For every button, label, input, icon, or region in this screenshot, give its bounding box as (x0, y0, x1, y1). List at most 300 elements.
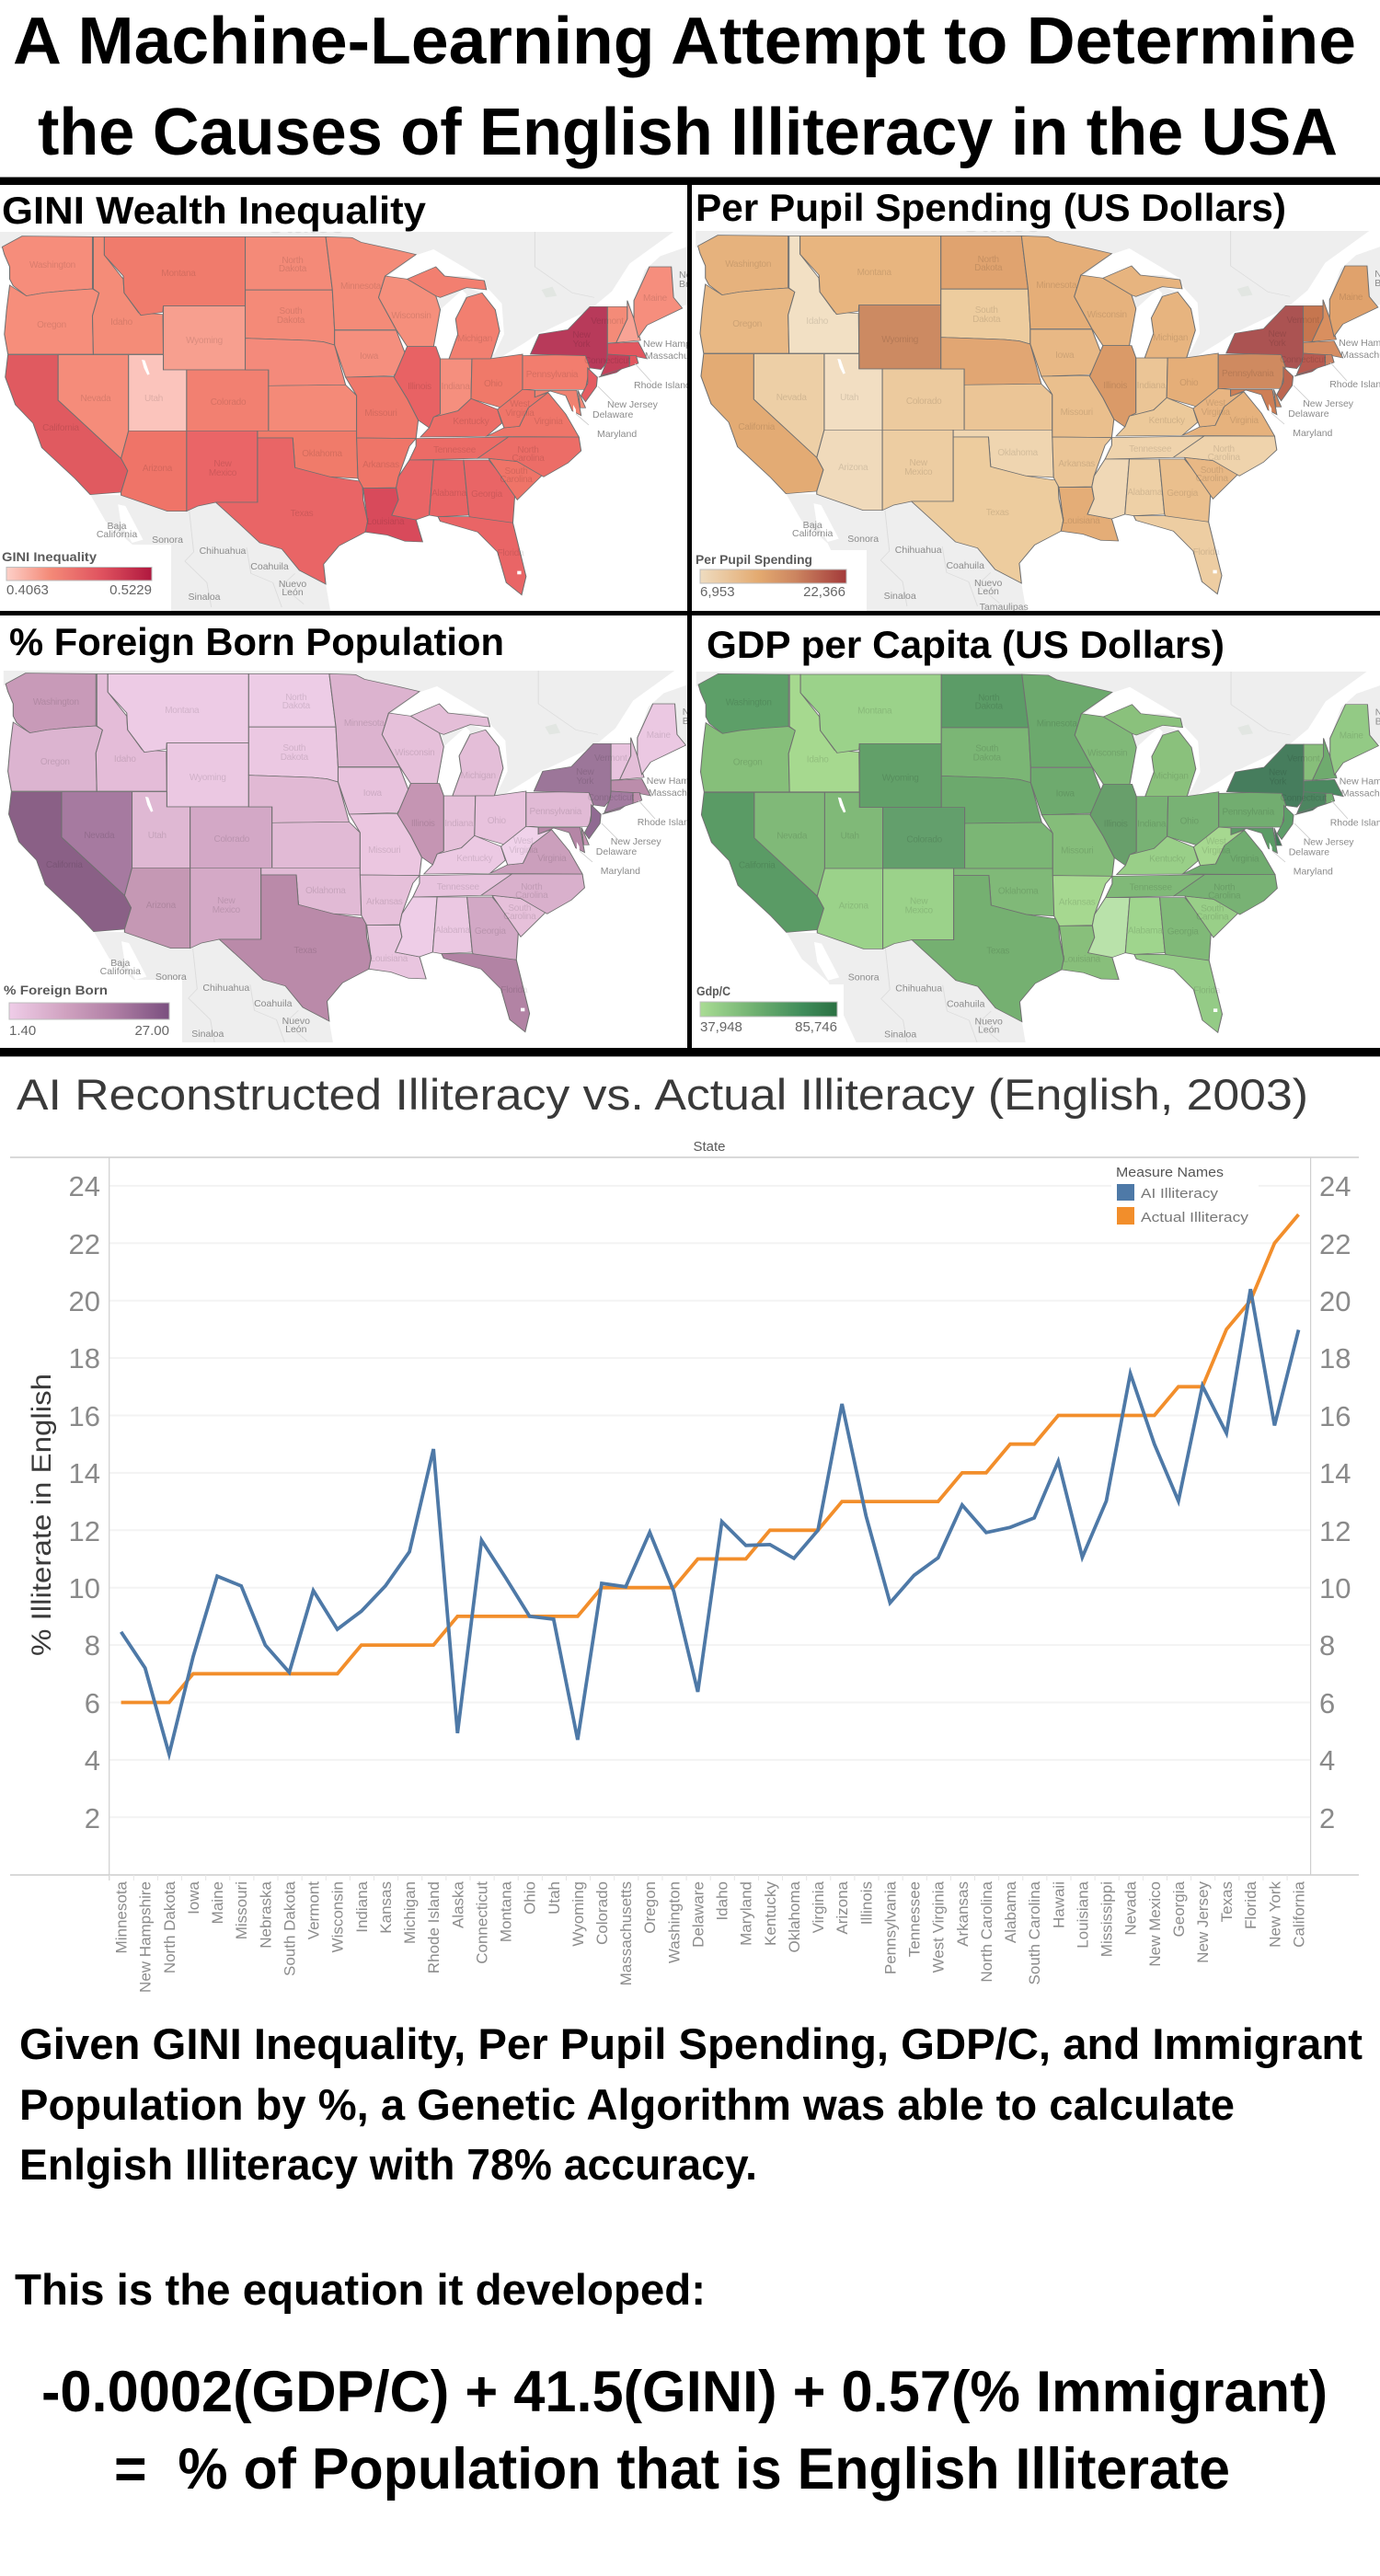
x axis state labels: Nebraska (257, 1880, 274, 1949)
foreign born choropleth map: Virginia (509, 845, 538, 856)
GDP per capita choropleth map: North (978, 694, 999, 704)
GINI choropleth map: Montana (161, 269, 196, 279)
per pupil spending choropleth map: West (1205, 398, 1225, 408)
GDP per capita choropleth map: Texas (986, 947, 1009, 957)
per pupil spending choropleth map: Chihuahua (895, 545, 942, 556)
per pupil spending choropleth map: Oregon (732, 319, 762, 329)
per pupil spending choropleth map: Carolina (1208, 453, 1241, 463)
per pupil spending choropleth map: Dakota (974, 263, 1003, 273)
x axis state labels: Virginia (810, 1880, 827, 1933)
GDP per capita choropleth map: Nuevo (975, 1017, 1003, 1028)
per pupil spending choropleth map: Indiana (1137, 381, 1166, 391)
GDP per capita choropleth map: Dakota (975, 702, 1003, 712)
GDP per capita choropleth map: Washington (726, 698, 772, 708)
x axis state labels: Washington (665, 1881, 683, 1963)
per pupil spending choropleth map: Louisiana (1063, 516, 1100, 526)
x axis state labels: Maryland (738, 1881, 755, 1946)
foreign born choropleth map: States (270, 646, 349, 676)
x axis state labels: Kentucky (762, 1881, 779, 1946)
foreign born legend: 27.00 (134, 1023, 169, 1039)
foreign born choropleth map: Connecticut (588, 793, 634, 803)
left y axis labels: 12 (69, 1515, 100, 1547)
left y axis labels: 10 (69, 1572, 100, 1604)
GDP per capita choropleth map: Idaho (807, 755, 829, 765)
foreign born choropleth map: New (217, 896, 236, 906)
GDP per capita choropleth map: Michigan (1154, 772, 1189, 782)
line chart: AI vs actual illiteracy by state (10, 1139, 1359, 1993)
per pupil spending choropleth map: Washington (725, 259, 771, 270)
GINI choropleth map: Arizona (143, 464, 173, 474)
GDP per capita legend (692, 984, 844, 1042)
GDP per capita choropleth map: New (1269, 768, 1287, 778)
per pupil spending choropleth map: Vermont (1286, 316, 1319, 326)
per pupil spending choropleth map: Tennessee (1129, 444, 1172, 454)
per pupil spending choropleth map: New (1269, 329, 1287, 339)
x axis state labels: Oklahoma (786, 1880, 803, 1952)
right y axis labels: 6 (1319, 1687, 1335, 1719)
GINI choropleth map: North (517, 445, 539, 455)
per pupil spending legend: 6,953 (700, 584, 735, 600)
foreign born choropleth map: Oklahoma (305, 886, 346, 896)
GINI choropleth map: Carolina (512, 454, 545, 464)
legend: measure names (1111, 1161, 1259, 1227)
per pupil spending choropleth map: California (792, 528, 834, 539)
foreign born choropleth map: Sonora (155, 972, 187, 983)
GINI legend: 0.4063 (6, 582, 49, 598)
foreign born choropleth map: New (683, 707, 702, 718)
right y axis labels: 10 (1319, 1572, 1351, 1604)
GINI choropleth map: New Jersey (607, 399, 659, 410)
per pupil spending choropleth map: Connecticut (1280, 355, 1327, 365)
foreign born choropleth map: Arizona (146, 901, 177, 911)
per pupil spending legend: Per Pupil Spending (696, 553, 812, 567)
equation (41, 2360, 1328, 2501)
x axis state labels: Wyoming (569, 1881, 587, 1947)
x axis state labels: New Jersey (1194, 1881, 1212, 1963)
per pupil spending choropleth map: South (1201, 466, 1224, 476)
left y axis labels: 16 (69, 1400, 100, 1432)
GINI choropleth map: New (572, 330, 592, 340)
legend: measure names: AI Illiteracy (1141, 1186, 1219, 1202)
per pupil spending choropleth map: Pennsylvania (1222, 369, 1274, 379)
GDP per capita choropleth map: West (1206, 837, 1226, 847)
per pupil spending choropleth map: Virginia (1230, 416, 1259, 426)
per pupil spending choropleth map: Minnesota (1036, 281, 1077, 291)
foreign born choropleth map: Arkansas (366, 897, 403, 907)
right y axis labels: 20 (1319, 1285, 1351, 1317)
GINI choropleth map: Utah (144, 394, 163, 404)
GDP per capita choropleth map: Oklahoma (998, 887, 1039, 897)
per pupil spending choropleth map (696, 231, 1380, 611)
left y axis labels: 8 (85, 1629, 100, 1662)
panel: per pupil spending (692, 182, 1380, 634)
GDP per capita choropleth map: States (962, 647, 1041, 677)
foreign born choropleth map: Chihuahua (202, 983, 249, 994)
per pupil spending choropleth map: Maine (1339, 293, 1363, 303)
GDP per capita choropleth map: Virginia (1230, 855, 1259, 865)
GDP per capita choropleth map: Iowa (1056, 789, 1075, 799)
GINI choropleth map: Colorado (211, 397, 247, 408)
foreign born choropleth map: Carolina (515, 891, 548, 901)
x axis state labels: Hawaii (1050, 1881, 1067, 1928)
per pupil spending choropleth map: León (978, 586, 999, 597)
per pupil spending choropleth map: Sinaloa (884, 591, 916, 602)
GINI choropleth map: Idaho (110, 317, 133, 328)
GDP per capita choropleth map: Louisiana (1063, 955, 1101, 965)
GINI choropleth map: Sonora (152, 535, 183, 546)
GINI choropleth map: Virginia (505, 408, 535, 419)
x axis state labels: Minnesota (113, 1880, 131, 1953)
GDP per capita legend: 85,746 (795, 1019, 837, 1035)
GINI legend (0, 545, 171, 611)
GINI choropleth map: Michigan (457, 334, 492, 344)
foreign born choropleth map: California (100, 966, 141, 977)
GDP per capita choropleth map: Nevada (776, 832, 808, 842)
x axis state labels: Wisconsin (329, 1881, 347, 1952)
GINI choropleth map: New (679, 270, 698, 281)
series: AI illiteracy (121, 1289, 1298, 1754)
x axis state labels: Montana (497, 1880, 515, 1942)
GDP per capita choropleth map: Sinaloa (884, 1029, 916, 1041)
GDP per capita choropleth map: Arizona (839, 902, 868, 912)
GINI choropleth map: Georgia (471, 489, 503, 500)
GINI choropleth map: Maryland (597, 429, 637, 440)
GDP per capita choropleth map: Oregon (733, 758, 763, 768)
per pupil spending choropleth map: California (738, 422, 776, 432)
GINI choropleth map: California (42, 423, 80, 433)
GINI choropleth map: Oregon (37, 320, 66, 330)
left y axis labels: 4 (85, 1744, 100, 1777)
GDP per capita choropleth map: Kentucky (1149, 855, 1186, 865)
x axis state labels: Arkansas (954, 1881, 972, 1947)
GDP per capita choropleth map: North (1213, 883, 1235, 893)
x axis state labels: New Mexico (1146, 1881, 1164, 1967)
GINI choropleth map: Oklahoma (302, 449, 342, 459)
GDP per capita choropleth map: Indiana (1137, 820, 1167, 830)
per pupil spending choropleth map: Mexico (904, 467, 933, 477)
GINI choropleth map: Baja (107, 521, 127, 532)
y axis title: % Illiterate in English (27, 1374, 57, 1656)
per pupil spending choropleth map: Illinois (1103, 381, 1127, 391)
GDP per capita choropleth map: Coahuila (947, 999, 985, 1010)
GINI choropleth map: Indiana (441, 382, 470, 392)
GDP per capita choropleth map: Arkansas (1059, 898, 1096, 908)
foreign born choropleth map: Nuevo (282, 1016, 310, 1027)
GINI choropleth map: Vermont (591, 316, 624, 327)
per pupil spending choropleth map: Florida (1193, 547, 1220, 558)
x axis state labels: Massachusetts (617, 1881, 635, 1985)
GDP per capita choropleth map: New Jersey (1304, 837, 1354, 848)
GDP per capita choropleth map: Maryland (1294, 867, 1333, 878)
per pupil spending choropleth map: Arkansas (1058, 459, 1095, 469)
left y axis labels: 20 (69, 1285, 100, 1317)
x axis state labels: California (1290, 1880, 1308, 1948)
per pupil spending choropleth map: Baja (803, 520, 822, 531)
x axis state labels: Tennessee (906, 1881, 924, 1957)
foreign born choropleth map: Carolina (503, 912, 536, 922)
foreign born choropleth map: Dakota (282, 701, 311, 711)
foreign born choropleth map: Oregon (40, 757, 70, 767)
GDP per capita choropleth map: York (1269, 777, 1287, 788)
right y axis labels (1319, 1170, 1351, 1834)
x axis state labels: South Dakota (281, 1880, 298, 1976)
GINI choropleth map: Chihuahua (200, 546, 247, 557)
GINI choropleth map: Maine (643, 293, 668, 304)
foreign born choropleth map: Maine (647, 730, 671, 741)
GINI choropleth map: New (213, 459, 233, 469)
per pupil spending choropleth map: North (1213, 444, 1235, 454)
GDP per capita choropleth map: León (978, 1025, 1000, 1036)
GDP per capita choropleth map: Tennessee (1130, 883, 1172, 893)
foreign born choropleth map: Utah (148, 831, 167, 841)
x axis state labels: New Hampshire (137, 1881, 155, 1993)
x axis state labels: Indiana (353, 1880, 371, 1933)
per pupil spending choropleth map: Utah (840, 393, 858, 403)
right y axis labels: 14 (1319, 1457, 1351, 1489)
foreign born choropleth map: Vermont (594, 753, 627, 764)
foreign born choropleth map: Rhode Island (638, 817, 695, 828)
left y axis labels: 18 (69, 1342, 100, 1374)
GINI choropleth map: Nuevo (279, 579, 306, 590)
GDP per capita choropleth map: Connecticut (1281, 794, 1327, 804)
GDP per capita choropleth map: Maine (1340, 731, 1363, 742)
per pupil spending choropleth map: Idaho (806, 316, 829, 327)
foreign born choropleth map: New Hampshire (647, 776, 716, 787)
panel: GDP per capita (692, 621, 1380, 1073)
GINI choropleth map: Tennessee (433, 445, 477, 455)
x axis state labels: Maine (209, 1881, 226, 1924)
foreign born choropleth map: California (46, 860, 83, 870)
x axis state labels: Ohio (522, 1881, 539, 1915)
per pupil spending choropleth map: Coahuila (946, 560, 984, 571)
per pupil spending choropleth map: Oklahoma (997, 448, 1039, 458)
x axis state labels: Alabama (1002, 1880, 1019, 1943)
foreign born choropleth map: Baja (110, 958, 130, 969)
equation: -0.0002(GDP/C) + 41.5(GINI) + 0.57(% Immigrant) (41, 2360, 1328, 2424)
GINI choropleth map: Brunswick (679, 279, 724, 290)
title: A Machine-Learning Attempt to Determine (13, 5, 1356, 78)
GINI choropleth map: North (282, 256, 304, 266)
foreign born choropleth map: Colorado (214, 834, 250, 845)
foreign born choropleth map (4, 671, 687, 1042)
GINI choropleth map: Nevada (81, 394, 111, 404)
GINI choropleth map: Coahuila (250, 561, 289, 572)
per pupil spending choropleth map: York (1269, 339, 1287, 349)
GDP per capita choropleth map: Pennsylvania (1222, 808, 1275, 818)
foreign born choropleth map: Iowa (363, 788, 383, 799)
foreign born choropleth map: Mexico (213, 905, 241, 915)
per pupil spending choropleth map: Missouri (1061, 408, 1093, 418)
GINI choropleth map: Texas (291, 509, 314, 519)
per pupil spending legend: 22,366 (803, 584, 845, 600)
x axis state labels: Colorado (593, 1881, 611, 1945)
GINI choropleth map: Louisiana (367, 517, 405, 527)
per pupil spending choropleth map: Maryland (1293, 428, 1333, 439)
GDP per capita choropleth map: South (1201, 904, 1224, 914)
x axis state labels: Pennsylvania (881, 1880, 899, 1974)
foreign born choropleth map: West (513, 836, 534, 846)
GINI choropleth map: Massachusetts (645, 351, 709, 362)
foreign born choropleth map: United (270, 620, 349, 650)
per pupil spending choropleth map: Colorado (906, 397, 942, 407)
x axis state labels: Michigan (401, 1881, 419, 1944)
foreign born choropleth map: New Jersey (611, 836, 661, 847)
right y axis labels: 8 (1319, 1629, 1335, 1662)
GDP per capita choropleth map: Alabama (1128, 926, 1163, 937)
GDP per capita choropleth map: Virginia (1202, 846, 1231, 857)
per pupil spending choropleth map: Wisconsin (1087, 310, 1127, 320)
right y axis labels: 18 (1319, 1342, 1351, 1374)
GDP per capita choropleth map: Minnesota (1037, 719, 1077, 730)
x axis state labels: Kansas (377, 1881, 395, 1934)
right y axis labels: 22 (1319, 1228, 1351, 1260)
foreign born choropleth map: Dakota (281, 753, 309, 763)
per pupil spending choropleth map: Alabama (1127, 488, 1163, 498)
per pupil spending choropleth map: Virginia (1202, 408, 1230, 418)
GINI choropleth map: Connecticut (584, 356, 630, 366)
panel: GINI wealth inequality (0, 195, 687, 611)
GINI choropleth map: New Hampshire (643, 339, 712, 350)
per pupil spending choropleth map: Wyoming (881, 335, 918, 345)
per pupil spending choropleth map: Delaware (1288, 408, 1329, 420)
foreign born choropleth map: León (285, 1024, 307, 1035)
GINI choropleth map: Virginia (534, 417, 563, 427)
foreign born choropleth map: Sinaloa (191, 1029, 224, 1040)
foreign born choropleth map: Maryland (601, 866, 640, 877)
chart title: AI Reconstructed Illiteracy vs. Actual Illiteracy (English, 2003) (17, 1070, 1308, 1119)
GINI choropleth map: West (510, 399, 530, 409)
per pupil spending choropleth map: Carolina (1196, 474, 1229, 484)
foreign born legend: 1.40 (9, 1023, 36, 1039)
per pupil spending choropleth map: Nuevo (974, 578, 1003, 589)
GINI choropleth map: Iowa (360, 351, 379, 362)
right y axis labels: 24 (1319, 1170, 1351, 1202)
GDP per capita choropleth map: Wyoming (882, 774, 919, 784)
GINI choropleth map: California (97, 529, 137, 540)
x axis state labels: Louisiana (1074, 1880, 1091, 1949)
explanatory text block: Population by %, a Genetic Algorithm was able to calculate (19, 2080, 1235, 2129)
right y axis labels: 12 (1319, 1515, 1351, 1547)
GINI choropleth map: Sinaloa (188, 592, 221, 603)
GDP per capita choropleth map: Ohio (1180, 817, 1199, 827)
GINI choropleth map: Wisconsin (391, 311, 431, 321)
per pupil spending choropleth map: United (961, 182, 1041, 213)
GINI choropleth map: Dakota (279, 264, 307, 274)
x axis state labels: Missouri (233, 1881, 250, 1939)
x axis state labels: Georgia (1170, 1880, 1188, 1937)
left y axis labels: 14 (69, 1457, 100, 1489)
per pupil spending choropleth map: Texas (986, 508, 1009, 518)
foreign born choropleth map: York (576, 776, 594, 787)
GDP per capita choropleth map: Georgia (1167, 927, 1199, 937)
right y axis labels: 4 (1319, 1744, 1335, 1777)
GINI choropleth map: Carolina (500, 475, 533, 485)
foreign born choropleth map: Coahuila (254, 998, 293, 1009)
foreign born choropleth map: Florida (500, 985, 528, 995)
x axis state labels: Alaska (449, 1880, 466, 1928)
foreign born choropleth map: Wyoming (190, 773, 226, 783)
foreign born choropleth map: New (576, 767, 594, 777)
GINI choropleth map: York (573, 339, 592, 350)
foreign born choropleth map: Idaho (114, 754, 136, 765)
foreign born choropleth map: North (521, 882, 542, 892)
GINI choropleth map: Ohio (484, 379, 503, 389)
GDP per capita choropleth map: Mexico (905, 906, 933, 916)
x axis state labels: Illinois (857, 1881, 875, 1925)
left y axis labels: 2 (85, 1802, 100, 1834)
x axis state labels: Delaware (690, 1881, 707, 1948)
title (13, 5, 1356, 169)
foreign born choropleth map: Missouri (368, 845, 400, 856)
right y axis labels: 2 (1319, 1802, 1335, 1834)
x axis state labels: New York (1266, 1881, 1283, 1948)
x axis state labels: Arizona (834, 1880, 851, 1935)
GDP per capita choropleth map: Carolina (1208, 891, 1241, 902)
per pupil spending choropleth map: Sonora (847, 534, 879, 545)
GDP per capita choropleth map: Sonora (848, 972, 880, 983)
x axis state labels: Mississippi (1098, 1881, 1115, 1957)
per pupil spending choropleth map: South (975, 305, 998, 316)
GDP per capita choropleth map: Wisconsin (1087, 749, 1127, 759)
per pupil spending choropleth map: Michigan (1153, 333, 1188, 343)
x axis state labels: South Carolina (1026, 1880, 1043, 1984)
per pupil spending choropleth map: Iowa (1055, 351, 1075, 361)
per pupil spending choropleth map: Nevada (776, 393, 807, 403)
GDP per capita choropleth map: New (910, 897, 928, 907)
foreign born choropleth map: Washington (33, 697, 79, 707)
explanatory text block: Given GINI Inequality, Per Pupil Spending, GDP/C, and Immigrant (19, 2019, 1363, 2068)
GDP per capita choropleth map: South (975, 744, 998, 754)
GINI choropleth map: South (505, 466, 527, 477)
per pupil spending choropleth map: Dakota (972, 315, 1001, 325)
GINI choropleth map: Wyoming (186, 336, 223, 346)
GINI choropleth map: León (282, 587, 304, 598)
x axis state labels: Connecticut (473, 1881, 490, 1964)
x axis state labels: Iowa (185, 1880, 202, 1915)
GDP per capita choropleth map: Illinois (1104, 820, 1128, 830)
legend: measure names: Measure Names (1116, 1166, 1224, 1180)
explanatory text block: Enlgish Illiteracy with 78% accuracy. (19, 2140, 757, 2189)
foreign born choropleth map: Ohio (488, 816, 507, 826)
foreign born choropleth map: Minnesota (344, 719, 385, 729)
foreign born choropleth map: Alabama (435, 926, 470, 936)
GINI choropleth map: Illinois (408, 382, 431, 392)
x axis state labels: Idaho (714, 1881, 731, 1921)
legend: measure names: Actual Illiteracy (1141, 1210, 1249, 1225)
heading: per pupil spending: Per Pupil Spending (US Dollars) (696, 186, 1286, 229)
equation intro: This is the equation it developed: (15, 2265, 706, 2314)
foreign born legend (0, 980, 182, 1042)
per pupil spending legend (692, 550, 867, 611)
foreign born choropleth map: Montana (165, 706, 200, 716)
foreign born choropleth map: Georgia (475, 926, 506, 937)
per pupil spending choropleth map: Montana (857, 268, 891, 278)
GINI choropleth map: Pennsylvania (526, 370, 579, 380)
GDP per capita choropleth map: Dakota (973, 753, 1001, 764)
GINI choropleth map: Arkansas (362, 460, 399, 470)
per pupil spending choropleth map: Arizona (838, 463, 868, 473)
heading: foreign born: % Foreign Born Population (9, 620, 504, 663)
x axis state labels: Oregon (641, 1881, 659, 1934)
GDP per capita choropleth map: Missouri (1061, 846, 1093, 857)
x axis state labels: Texas (1218, 1881, 1236, 1922)
foreign born choropleth map: South (508, 903, 531, 914)
foreign born choropleth map: Massachusetts (649, 788, 713, 799)
GINI choropleth map (0, 232, 687, 611)
GINI choropleth map: Alabama (431, 489, 467, 499)
explanatory text block (19, 2019, 1363, 2189)
panel: foreign born population (4, 627, 687, 1042)
